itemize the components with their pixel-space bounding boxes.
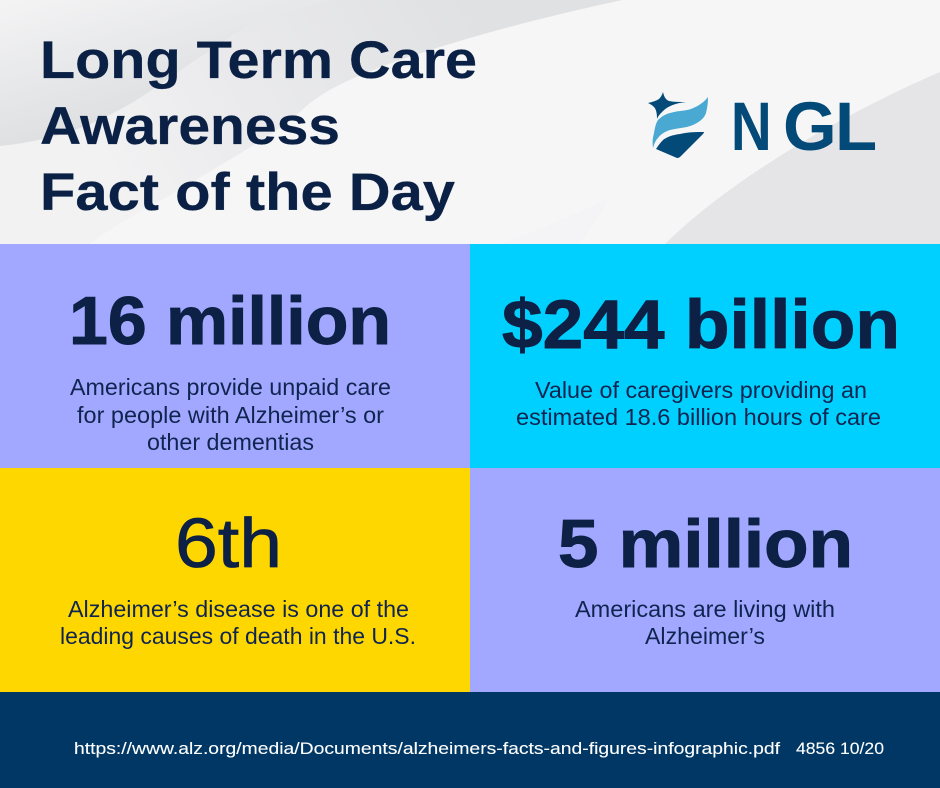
title: Awareness [40,97,340,156]
panel: 16 million: other dementias [147,429,314,455]
title [40,31,477,222]
panel: 16 million: for people with Alzheimer’s or [77,402,384,428]
panel: 6th: 6th [175,504,282,582]
panel: 5 million: Americans are living with [575,596,835,622]
panel: 5 million: 5 million [558,506,853,582]
panel: 6th: Alzheimer’s disease is one of the [68,596,409,622]
panel: $244 billion: estimated 18.6 billion hours of care [516,404,881,430]
panel: 16 million: 16 million [69,283,391,359]
icon: star [648,92,686,119]
logo wordmark [731,88,877,165]
panel: 5 million [470,468,940,692]
logo wordmark: G [783,88,837,165]
logo wordmark: N [731,89,772,165]
panel: $244 billion: $244 billion [502,286,900,363]
panel: 6th: leading causes of death in the U.S. [60,623,416,649]
panel: $244 billion: Value of caregivers providing an [535,377,867,403]
footer band [0,692,940,788]
source citation: https://www.alz.org/media/Documents/alzheimers-facts-and-figures-infographic.pdf [74,739,780,758]
panel: $244 billion [470,244,940,468]
icon: light blue swoosh [653,97,708,148]
panel: 16 million [0,244,470,468]
header background [0,0,940,244]
title: Fact of the Day [40,163,456,222]
logo: NGL [648,88,877,165]
title: Long Term Care [40,31,477,90]
panel: 16 million: Americans provide unpaid care [70,374,391,400]
panel: 6th [0,468,470,692]
icon: shield base [656,132,704,158]
source citation: 4856 10/20 [796,739,884,758]
panel: 5 million: Alzheimer’s [645,623,765,649]
logo wordmark: L [835,88,877,165]
